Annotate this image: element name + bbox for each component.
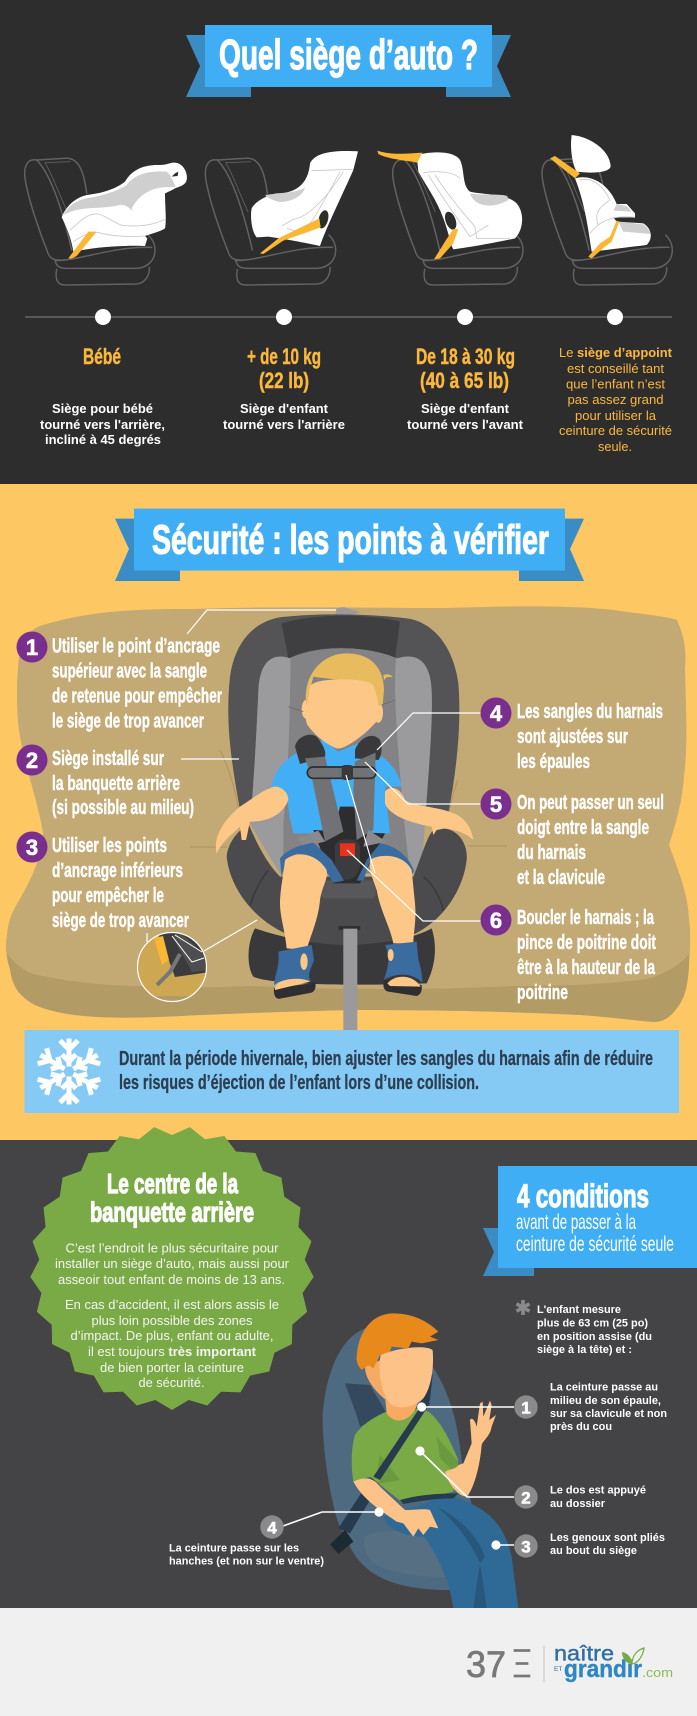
column: siège d'appoint [559,346,673,454]
leader lines [147,610,481,951]
badge: le centre de la banquette arrière: de bien porter la ceinture [100,1361,244,1375]
belt upper and buckle [330,1373,433,1554]
column: siège d'appoint: pas assez grand [568,393,664,407]
badge: le centre de la banquette arrière: installer un siège d’auto, mais aussi pour [55,1257,289,1271]
seat shell [227,607,467,1030]
sandals [274,942,423,999]
callout 2: (si possible au milieu) [52,797,194,819]
column: bébé [40,344,165,447]
badge: le centre de la banquette arrière: de sécurité. [138,1376,204,1390]
column: de 18 à 30 kg: De 18 à 30 kg [416,344,515,369]
text: height condition: L'enfant mesure [537,1304,621,1316]
condition 3: au bout du siège [550,1545,637,1557]
callout 6: poitrine [517,982,568,1004]
column: siège d'appoint: pour utiliser la [575,409,656,423]
column: bébé: Siège pour bébé [52,402,153,416]
illustration: child with seat belt [323,1313,518,1608]
text: height condition: plus de 63 cm (25 po) [537,1318,648,1330]
panel: ceinture de sécurité [0,1127,697,1608]
panel: sécurité [0,484,697,1140]
heading banner: Quel siège d'auto: Quel siège d’auto ? [219,31,478,78]
column: de 18 à 30 kg: (40 à 65 lb) [420,368,509,393]
callout 4: 4 [490,701,503,726]
column: plus de 10 kg: + de 10 kg [247,344,321,369]
badge: le centre de la banquette arrière: plus loin possible des zones [92,1314,252,1328]
condition 2: 2 [521,1488,531,1508]
callout 3: d’ancrage inférieurs [52,860,183,882]
icon: asterisk [516,1300,530,1315]
logo: naître et grandir: grandir [564,1656,642,1683]
illustration: siège d'enfant face à la route [377,151,523,285]
text: height condition: en position assise (du [537,1331,652,1343]
callout 6: 6 [490,908,502,933]
callout 4: sont ajustées sur [517,726,628,748]
callout 3: pour empêcher le [52,885,164,907]
arms [353,1401,496,1537]
badge: le centre de la banquette arrière: C’est l’endroit le plus sécuritaire pour [66,1242,278,1256]
column: plus de 10 kg: tourné vers l'arrière [223,418,345,432]
winter note: les risques d’éjection de l’enfant lors d’une collision. [119,1071,479,1094]
column: siège d'appoint: seule. [598,440,632,454]
illustration: siège d'appoint [542,135,672,285]
condition 3: 3 [521,1538,531,1556]
column: siège d'appoint: est conseillé tant [567,362,665,376]
heading banner: sécurité [115,509,584,581]
heading banner: 4 conditions [483,1166,697,1276]
icon: snowflake [36,1038,102,1104]
condition 1: milieu de son épaule, [550,1395,661,1407]
car seat bench background [6,606,690,1022]
footer [0,1608,697,1716]
condition 1: sur sa clavicule et non [550,1408,667,1420]
illustration: siège d'enfant dos à la route [205,151,358,285]
badge: le centre de la banquette arrière: banquette arrière [90,1196,254,1228]
head [357,1313,438,1420]
illustration: child in forward-facing seat [216,607,473,1030]
condition 2 [514,1484,646,1510]
column: bébé: tourné vers l'arrière, [40,418,165,432]
inset: anchor detail [137,932,210,1004]
badge: le centre de la banquette arrière: d’impact. De plus, enfant ou adulte, [70,1329,274,1343]
callout 5: et la clavicule [517,867,605,889]
logo: naître et grandir: naître [554,1642,614,1666]
condition 1: près du cou [550,1421,612,1433]
text: height condition [537,1304,652,1356]
condition 4: 4 [267,1518,277,1538]
callout 3: 3 [26,835,38,860]
condition 2: au dossier [550,1498,606,1510]
callout 5: 5 [490,792,502,817]
pants [383,1493,518,1608]
logo: naître et grandir [554,1642,673,1683]
callout 1: le siège de trop avancer [52,710,204,732]
child's arms [216,787,473,853]
callout 1: de retenue pour empêcher [52,686,222,708]
condition 1 [514,1382,667,1433]
condition 1: 1 [521,1398,531,1418]
condition 4: hanches (et non sur le ventre) [169,1556,324,1568]
badge: le centre de la banquette arrière: Le centre de la [107,1168,238,1199]
column: bébé: Bébé [83,344,121,369]
column: siège d'appoint: ceinture de sécurité [559,424,672,438]
badge: le centre de la banquette arrière: asseoir tout enfant de moins de 13 ans. [58,1273,285,1287]
leader lines with dots [283,1403,514,1549]
callout 4: les épaules [517,751,590,773]
booster seat [323,1328,487,1590]
panel: quel siège d'auto [0,0,697,484]
callout 3: Utiliser les points [52,835,167,857]
badge: le centre de la banquette arrière: il est toujours très important [88,1345,257,1359]
logo: naître et grandir: ET [554,1666,562,1673]
column: bébé: incliné à 45 degrés [45,433,161,447]
callout 5 [480,788,664,889]
callout 1: supérieur avec la sangle [52,660,207,682]
column: plus de 10 kg [223,344,345,432]
logo: naître et grandir: .com [642,1665,673,1680]
callout 2: 2 [26,748,38,773]
condition 2: Le dos est appuyé [550,1484,646,1496]
child's legs and shorts [280,843,415,950]
condition 3: Les genoux sont pliés [550,1532,665,1544]
callout 5: du harnais [517,842,586,864]
condition 4 [169,1515,324,1568]
harness [295,735,387,883]
winter note [24,1030,679,1113]
column: de 18 à 30 kg: tourné vers l'avant [407,418,524,432]
callout 2: Siège installé sur [52,748,164,770]
column: siège d'appoint: Le siège d’appoint [559,346,673,360]
column: de 18 à 30 kg [407,344,524,432]
column: de 18 à 30 kg: Siège d'enfant [421,402,510,416]
column: plus de 10 kg: Siège d'enfant [240,402,329,416]
callout 4 [480,698,663,773]
heading banner: Quel siège d'auto [186,25,511,97]
condition 1: La ceinture passe au [550,1382,658,1394]
illustration: siège pour bébé [25,158,187,285]
callout 2 [16,744,194,819]
logo: 37e [466,1644,530,1685]
badge: le centre de la banquette arrière: En cas d’accident, il est alors assis le [65,1298,279,1312]
callout 1: 1 [26,635,38,660]
condition 4: La ceinture passe sur les [169,1542,299,1554]
shirt [352,1400,458,1503]
column: siège d'appoint: que l’enfant n’est [566,378,666,392]
callout 1 [16,632,222,732]
text: height condition: siège à la tête) et : [537,1344,632,1356]
logo: 37e: 37 [466,1644,506,1685]
condition 3 [514,1532,665,1558]
callout 1: Utiliser le point d’ancrage [52,636,220,658]
callout 3 [16,832,189,932]
column: plus de 10 kg: (22 lb) [259,368,309,393]
callout 6 [480,904,656,1004]
callout 3: siège de trop avancer [52,910,189,932]
child's shirt and head [272,653,402,833]
callout 2: la banquette arrière [52,773,180,795]
timeline [25,309,672,325]
badge: le centre de la banquette arrière [30,1127,314,1410]
